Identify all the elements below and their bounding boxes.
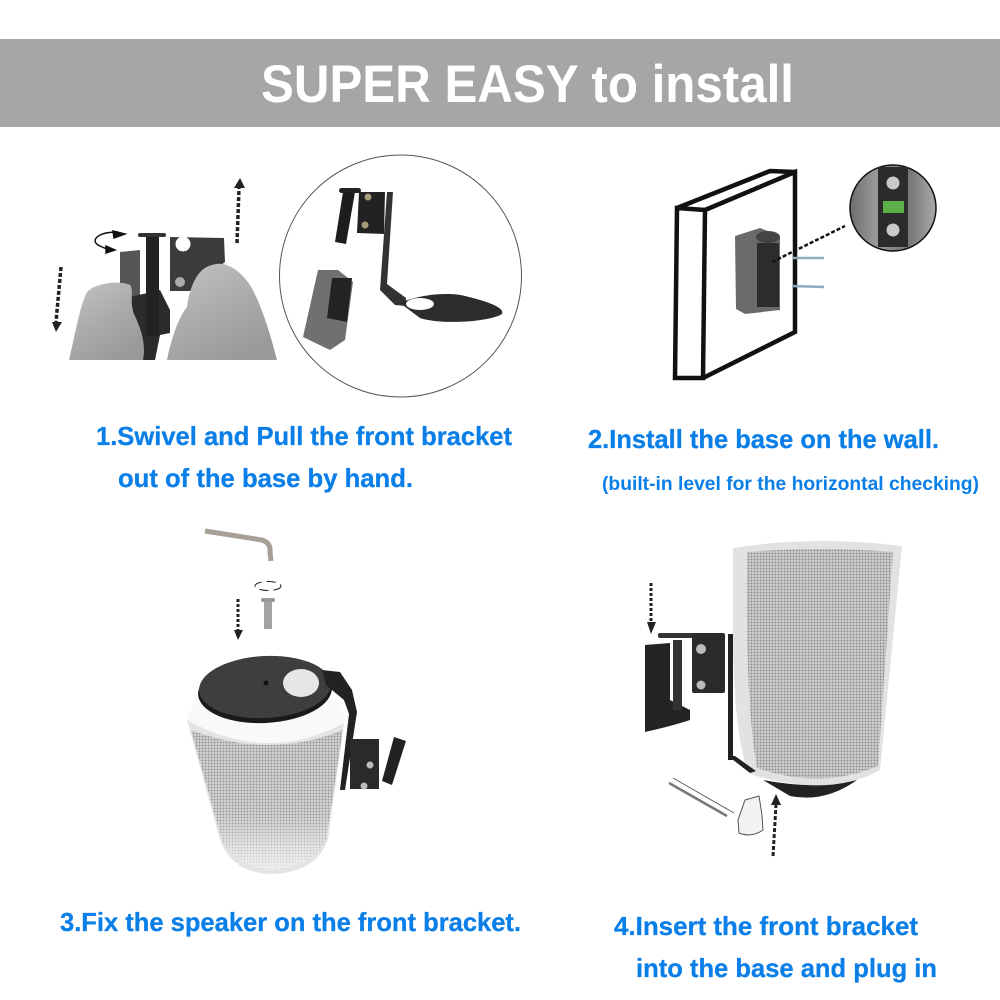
screws (792, 258, 824, 287)
wall base bracket (735, 228, 780, 314)
speaker with plate (187, 653, 406, 874)
bracket (645, 633, 756, 773)
step 3 caption: 3.Fix the speaker on the front bracket. (60, 907, 521, 937)
step 1 caption: 1.Swivel and Pull the front bracket (96, 421, 512, 451)
rotate symbol (255, 582, 281, 590)
zoom circle: built-in level (850, 165, 936, 251)
speaker body (187, 695, 346, 874)
arrow: down (234, 599, 243, 640)
power plug (669, 778, 763, 835)
arrow: up (234, 178, 245, 243)
front bracket arm (322, 670, 406, 790)
step 4 caption: into the base and plug in (636, 953, 937, 983)
step 4 caption: 4.Insert the front bracket (614, 911, 918, 941)
step 1 caption (96, 421, 512, 493)
wall outline (675, 171, 795, 378)
circle: detached bracket detail (280, 155, 522, 397)
screw (261, 598, 275, 629)
title banner: SUPER EASY to install (261, 55, 794, 114)
panel: step 1 (52, 155, 522, 493)
dashed pointer (772, 226, 845, 262)
allen key (205, 531, 271, 561)
panel: step 4 (614, 541, 937, 983)
step 2 caption (588, 424, 979, 495)
icon: swivel arrows (95, 231, 125, 253)
title banner (0, 39, 1000, 127)
panel: step 2 (588, 165, 979, 495)
photo: hands pulling bracket (69, 233, 277, 360)
arrow: down (52, 267, 62, 332)
step 1 caption: out of the base by hand. (118, 463, 413, 493)
speaker (733, 541, 902, 798)
step 2 caption: 2.Install the base on the wall. (588, 424, 939, 454)
black plate (196, 653, 334, 726)
step 4 caption (614, 911, 937, 983)
arrow: down left (647, 583, 656, 634)
arrow: up (771, 794, 781, 856)
step 2 caption: (built-in level for the horizontal checking) (602, 474, 979, 495)
panel: step 3 (60, 531, 521, 937)
